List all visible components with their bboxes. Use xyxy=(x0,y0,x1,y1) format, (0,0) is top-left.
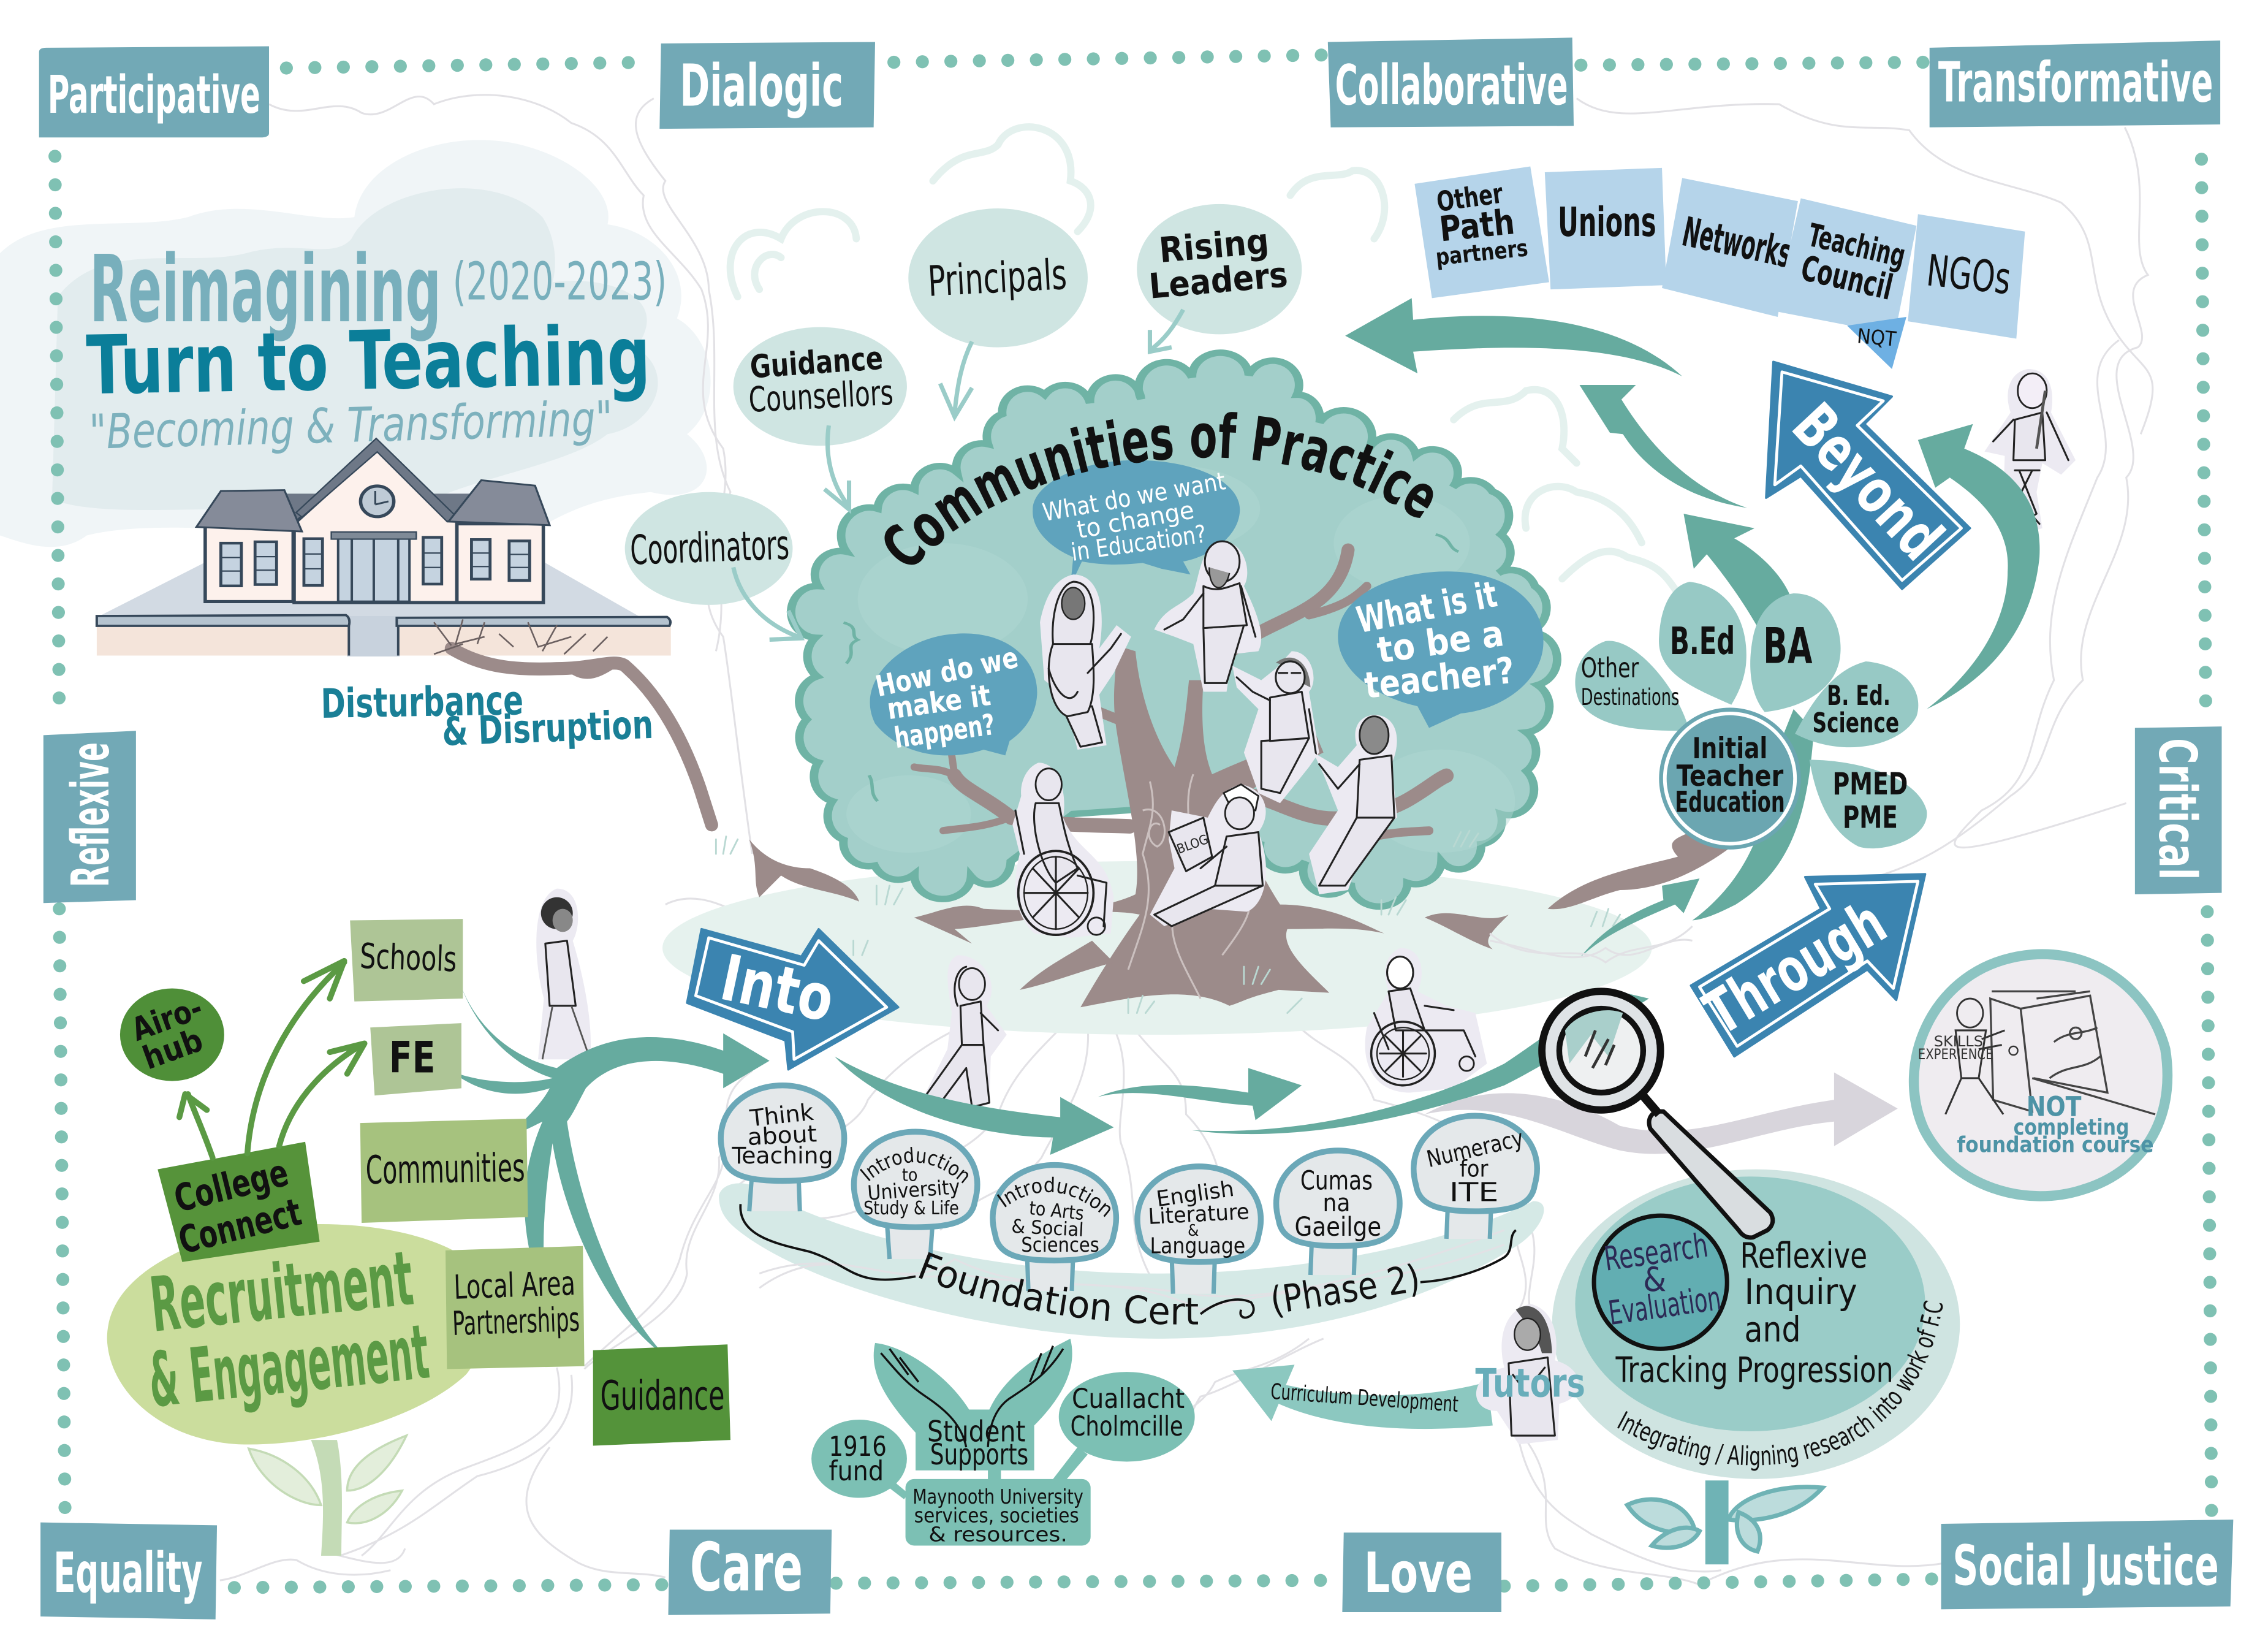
subtitle: Becoming and Transforming: "Becoming & Transforming" xyxy=(88,392,613,460)
illustration: green plant xyxy=(249,1436,406,1556)
arrow: right curve to figure xyxy=(1918,424,2039,709)
person: tutor with label: Tutors xyxy=(1476,1361,1585,1406)
speech bubble: What do we want to change in Education: in Education? xyxy=(1069,520,1208,567)
oval: Coordinators: Coordinators xyxy=(629,522,790,574)
box: Local Area Partnerships xyxy=(446,1246,585,1369)
mushroom: Cumas na Gaeilge: Cumas xyxy=(1300,1166,1373,1197)
box: Local Area Partnerships: Partnerships xyxy=(452,1300,580,1343)
person: student with BLOG laptop xyxy=(1150,785,1266,926)
oval: Guidance Counsellors: Counsellors xyxy=(748,373,894,421)
mushroom: Cumas na Gaeilge: na xyxy=(1322,1189,1350,1217)
sticky note: Unions xyxy=(1545,168,1666,289)
oval: Cuallacht Cholmcille: Cholmcille xyxy=(1071,1410,1183,1442)
panel: research and reflexive inquiry: Inquiry xyxy=(1745,1272,1857,1312)
box: FE xyxy=(370,1023,461,1095)
sticky note: Teaching Council: Council xyxy=(1797,248,1897,308)
sticky note: Networks xyxy=(1662,178,1798,317)
panel: research and reflexive inquiry: Tracking Progression xyxy=(1615,1350,1894,1391)
box: College Connect: College xyxy=(170,1151,293,1221)
flower: ITE pathways: B.Ed xyxy=(1670,620,1735,663)
speech bubble: What do we want to change in Education: to change xyxy=(1075,496,1196,544)
label: Foundation Cert Phase 2: (Phase 2) xyxy=(1267,1257,1423,1323)
box: Maynooth University services: & resources. xyxy=(928,1522,1068,1546)
panel: recruitment and engagement blob: Recruitment xyxy=(146,1235,417,1349)
person: woman in wheelchair xyxy=(1012,763,1113,938)
swoosh arrows converging into Into xyxy=(451,974,770,1356)
panel: student supports hands xyxy=(874,1339,1072,1472)
panel: research and reflexive inquiry: Reflexive xyxy=(1740,1236,1867,1276)
flower: ITE pathways: PMED xyxy=(1833,766,1908,802)
oval: 1916 fund: 1916 xyxy=(829,1430,887,1463)
person: student with BLOG laptop: BLOG xyxy=(1175,832,1210,858)
flower: ITE pathways: Teacher xyxy=(1677,759,1783,793)
speech bubble: What is it to be a teacher: to be a xyxy=(1375,612,1506,671)
sticky note: Teaching Council: Teaching xyxy=(1805,217,1909,275)
oval: Cuallacht Cholmcille: Cuallacht xyxy=(1072,1382,1185,1415)
flower: ITE pathways: Destinations xyxy=(1581,683,1679,710)
tag: Equality: Equality xyxy=(53,1542,202,1605)
tag: Participative xyxy=(39,47,269,137)
oval: Coordinators xyxy=(625,492,802,640)
mushroom: Numeracy for ITE: ITE xyxy=(1449,1178,1498,1208)
mushroom: Introduction to University Study and Life: Introduction xyxy=(860,1147,968,1183)
arrow: thin curve to left xyxy=(1579,385,1747,508)
panel: research and reflexive inquiry: Integrating / Aligning research into work of F.C xyxy=(1617,1301,1943,1471)
panel: recruitment and engagement blob: & Engagement xyxy=(145,1308,433,1425)
speech bubble: What do we want to change in Education xyxy=(1033,460,1240,586)
heading: Communities of Practice: Communities of Practice xyxy=(884,412,1433,565)
mushroom: Think about Teaching: Teaching xyxy=(731,1142,833,1169)
box: Schools xyxy=(350,919,463,1002)
box: Maynooth University services: services, societies xyxy=(914,1504,1079,1528)
oval: Guidance Counsellors: Guidance xyxy=(749,340,884,386)
oval: Guidance Counsellors xyxy=(734,327,907,509)
mushroom: Think about Teaching: about xyxy=(747,1120,817,1151)
mushroom: Cumas na Gaeilge: Gaeilge xyxy=(1294,1212,1381,1243)
speech bubble: How do we make it happen: How do we xyxy=(873,641,1021,704)
oval: Principals xyxy=(908,208,1088,417)
arrow: swoosh to flower xyxy=(1579,878,1699,958)
person: woman with braid xyxy=(1984,369,2076,536)
mushroom: Numeracy for ITE: Numeracy xyxy=(1424,1124,1526,1173)
mushroom: Numeracy for ITE xyxy=(1414,1116,1537,1239)
mushroom: Introduction to University Study and Life: University xyxy=(867,1174,961,1205)
tag: Equality xyxy=(40,1523,217,1619)
box: Maynooth University services: Maynooth University xyxy=(912,1485,1083,1509)
circle: Airo-hub xyxy=(120,989,224,1081)
box: Guidance: Guidance xyxy=(601,1372,725,1420)
arrow: long rising swoosh xyxy=(1192,991,1649,1134)
speech bubble: How do we make it happen: make it xyxy=(885,679,993,726)
flower: ITE pathways: BA xyxy=(1763,617,1813,674)
oval: 1916 fund xyxy=(811,1420,907,1498)
box: Schools: Schools xyxy=(359,936,457,980)
box: Guidance xyxy=(593,1344,730,1446)
sticky note: Teaching Council xyxy=(1775,198,1916,334)
speech bubble: What is it to be a teacher: teacher? xyxy=(1362,649,1516,707)
tag: Love xyxy=(1342,1532,1501,1612)
tag: Critical: Critical xyxy=(2147,738,2207,880)
illustration: teal plant xyxy=(1627,1480,1822,1564)
box: College Connect: Connect xyxy=(175,1190,306,1263)
oval: 1916 fund: fund xyxy=(829,1455,884,1487)
person: woman with glasses xyxy=(1232,651,1319,803)
flower: ITE pathways: PME xyxy=(1843,799,1898,835)
flower stem and swoosh xyxy=(1693,709,1814,921)
tag: Care: Care xyxy=(690,1529,803,1607)
label: Disturbance and Disruption: Disturbance xyxy=(320,677,524,728)
tree trunk and branches xyxy=(914,550,1509,1007)
mushroom: Think about Teaching xyxy=(721,1086,844,1211)
person: curly haired walker xyxy=(536,889,591,1059)
label: Disturbance and Disruption: & Disruption xyxy=(441,702,654,755)
illustration: magnifying glass xyxy=(1542,991,1773,1238)
mushroom: Introduction to Arts and Social Sciences: & Social xyxy=(1011,1216,1084,1241)
mushroom: Numeracy for ITE: for xyxy=(1460,1155,1489,1182)
mushroom: Introduction to Arts and Social Sciences: to Arts xyxy=(1028,1198,1085,1225)
mushroom: Introduction to Arts and Social Sciences: Sciences xyxy=(1021,1233,1099,1257)
box: FE: FE xyxy=(389,1032,435,1083)
label: Disturbance and Disruption xyxy=(320,677,654,755)
tag: Critical xyxy=(2135,726,2221,894)
mushroom: Introduction to Arts and Social Sciences: Introduction xyxy=(996,1177,1110,1217)
tag: Dialogic xyxy=(659,42,875,129)
sticky note: Other Path partners xyxy=(1414,167,1549,298)
box: Communities: Communities xyxy=(365,1146,525,1193)
panel: research and reflexive inquiry: Research xyxy=(1602,1226,1710,1279)
label: Foundation Cert Phase 2 xyxy=(739,1204,1517,1325)
decorative pale cloud outlines xyxy=(730,127,1678,593)
arrow: Into xyxy=(687,929,898,1070)
arrow: after Into xyxy=(835,1056,1113,1155)
sticky note: NGOs: NGOs xyxy=(1924,245,2013,304)
sticky note: Other Path partners: partners xyxy=(1435,234,1529,271)
panel: research and reflexive inquiry: and xyxy=(1745,1310,1801,1350)
mushroom: Introduction to University Study and Life: to xyxy=(902,1165,917,1185)
arrow: Beyond: Beyond xyxy=(1778,390,1956,574)
speech bubble: What is it to be a teacher xyxy=(1338,571,1544,728)
panel: student supports hands: Student xyxy=(927,1415,1025,1448)
flower: ITE pathways: Initial xyxy=(1693,732,1767,766)
tag: Reflexive xyxy=(44,731,136,903)
tree canopy xyxy=(791,352,1557,907)
illustration: disrupting root from wall xyxy=(434,619,1750,909)
person: bearded man xyxy=(1155,541,1261,692)
mushroom: English Literature and Language: Literature xyxy=(1148,1199,1250,1230)
foundation certificate band xyxy=(719,1183,1544,1339)
speech bubble: How do we make it happen xyxy=(870,633,1037,755)
ground ellipse under tree xyxy=(662,861,1652,1035)
panel: not completing foundation course: completing xyxy=(2014,1115,2129,1140)
arrow: Through: Through xyxy=(1693,887,1898,1049)
mushroom: Think about Teaching: Think xyxy=(748,1098,815,1132)
panel: research and reflexive inquiry xyxy=(1552,1170,1960,1479)
green arrows from College Connect xyxy=(180,961,365,1158)
sticky note: Other Path partners: Path xyxy=(1438,202,1517,250)
person: woman in hijab xyxy=(1040,574,1131,750)
speech bubble: What do we want to change in Education: What do we want xyxy=(1041,467,1227,527)
person: tutor with label xyxy=(1476,1304,1585,1444)
oval: Rising Leaders: Rising xyxy=(1158,221,1270,271)
tag: Collaborative xyxy=(1328,37,1574,127)
arrow: curriculum development: Curriculum Development xyxy=(1270,1379,1459,1417)
box: College Connect xyxy=(157,1142,320,1263)
title: Reimagining: Reimagining xyxy=(89,235,441,343)
grass tufts xyxy=(716,831,1620,1013)
oval: Cuallacht Cholmcille xyxy=(1059,1372,1195,1462)
person: man in wheelchair xyxy=(1365,948,1487,1092)
panel: not completing foundation course: NOT xyxy=(2027,1090,2082,1122)
flower: ITE pathways xyxy=(1575,582,1927,850)
speech bubble: How do we make it happen: happen? xyxy=(892,708,997,755)
tag: Participative: Participative xyxy=(48,65,260,126)
tag: Collaborative: Collaborative xyxy=(1335,54,1568,118)
tab: NQT: NQT xyxy=(1856,324,1898,351)
panel: student supports hands: Supports xyxy=(930,1438,1028,1472)
oval: Rising Leaders xyxy=(1137,204,1302,352)
panel: not completing foundation course: SKILLS xyxy=(1934,1033,1983,1050)
tag: Love: Love xyxy=(1364,1542,1473,1605)
tag: Transformative xyxy=(1930,40,2220,127)
mushroom: English Literature and Language xyxy=(1137,1166,1261,1294)
panel: not completing foundation course xyxy=(1914,954,2167,1196)
circle: Airo-hub: Airo- xyxy=(127,989,207,1049)
mushroom: English Literature and Language: English xyxy=(1155,1176,1235,1212)
oval: Principals: Principals xyxy=(927,250,1068,306)
panel: recruitment and engagement blob xyxy=(107,1224,480,1445)
mushroom: Introduction to University Study and Life: Study & Life xyxy=(863,1198,959,1219)
arrow: top curve to partners xyxy=(1345,298,1682,376)
mushroom: English Literature and Language: & xyxy=(1188,1222,1199,1240)
label: Foundation Cert Phase 2: Foundation Cert xyxy=(919,1252,1198,1325)
flower: ITE pathways: Science xyxy=(1812,707,1899,739)
sticky note: Networks: Networks xyxy=(1678,208,1796,277)
tag: Dialogic: Dialogic xyxy=(680,52,843,120)
circle: Airo-hub: hub xyxy=(138,1022,208,1077)
panel: title cloud background xyxy=(0,140,711,557)
mushroom: Introduction to Arts and Social Sciences xyxy=(990,1162,1119,1291)
panel: research and reflexive inquiry: & xyxy=(1643,1260,1666,1299)
tag: Reflexive: Reflexive xyxy=(61,742,121,887)
arrow: second step xyxy=(1098,1068,1302,1120)
root lines over band xyxy=(759,926,1693,1310)
mushroom: English Literature and Language: Language xyxy=(1150,1234,1245,1259)
wandering root lines xyxy=(220,95,2153,1585)
sticky note: NGOs xyxy=(1908,214,2025,338)
panel: not completing foundation course: EXPERIENCE xyxy=(1918,1046,1993,1063)
arrow: from flower upward xyxy=(1683,514,1794,630)
mushroom: Cumas na Gaeilge xyxy=(1276,1151,1400,1275)
oval: Rising Leaders: Leaders xyxy=(1147,254,1289,307)
box: Local Area Partnerships: Local Area xyxy=(453,1264,576,1307)
panel: research and reflexive inquiry: Evaluation xyxy=(1606,1279,1723,1333)
arrow: Into: Into xyxy=(715,941,840,1037)
box: Communities xyxy=(360,1119,528,1223)
arrow: curriculum development xyxy=(1232,1364,1493,1429)
sticky note: Other Path partners: Other xyxy=(1435,177,1505,218)
flower: ITE pathways: Other xyxy=(1581,652,1639,684)
speech bubble: What is it to be a teacher: What is it xyxy=(1353,573,1500,641)
illustration: school building xyxy=(97,438,671,656)
person: man gesturing with tie xyxy=(1309,715,1397,894)
mushroom: Introduction to University Study and Life xyxy=(851,1129,980,1259)
tag: Social Justice xyxy=(1941,1520,2233,1609)
sticky note: Unions: Unions xyxy=(1558,199,1656,246)
panel: not completing foundation course: foundation course xyxy=(1957,1132,2154,1157)
title: years: (2020-2023) xyxy=(453,252,667,313)
box: Maynooth University services xyxy=(886,1447,1091,1546)
title: Turn to Teaching: Turn to Teaching xyxy=(85,309,651,413)
tab: NQT xyxy=(1847,317,1906,369)
flower: ITE pathways: Education xyxy=(1675,785,1785,819)
arrow: grey path to not completing xyxy=(1425,1072,1898,1154)
person: girl walking with ponytail xyxy=(926,955,1007,1117)
flower: ITE pathways: B. Ed. xyxy=(1827,679,1891,712)
